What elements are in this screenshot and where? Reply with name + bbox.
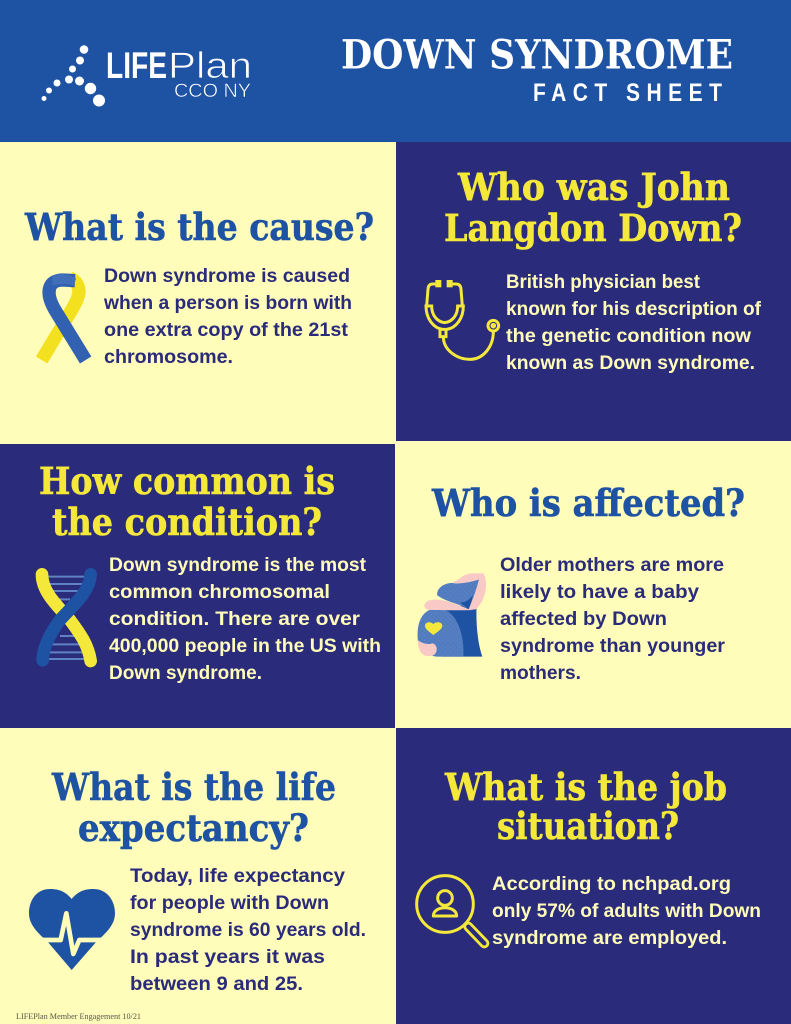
heading: job situation (444, 765, 727, 848)
body text: how common: common chromosomal (109, 581, 330, 603)
panel: what is the life expectancy (0, 728, 395, 1024)
body text: John Langdon Down: known for his description of (506, 298, 761, 320)
logo: LIFEPlan CCO NY: CCO NY (174, 80, 251, 102)
body text: who is affected: syndrome than younger (500, 635, 725, 657)
body text: who is affected: Older mothers are more (500, 554, 724, 576)
icon: awareness ribbon (42, 274, 86, 360)
panel: what is the job situation (396, 728, 791, 1024)
body text: job situation: According to nchpad.org (492, 873, 731, 895)
heading: how common: How common is (39, 459, 335, 503)
body text: John Langdon Down: British physician best (506, 271, 700, 293)
body text: life expectancy: syndrome is 60 years old. (130, 919, 366, 941)
body text: how common: Down syndrome. (109, 662, 262, 684)
heading: job situation: What is the job (444, 765, 727, 809)
icon: magnifier with person (417, 876, 484, 943)
body text: life expectancy (130, 865, 366, 995)
heading: life expectancy (51, 765, 336, 850)
body text: cause (103, 265, 352, 368)
body text: John Langdon Down: the genetic condition now (506, 325, 752, 347)
body text: life expectancy: between 9 and 25. (130, 973, 303, 995)
body text: job situation: syndrome are employed. (492, 927, 727, 949)
body text: cause: Down syndrome is caused (104, 265, 350, 287)
heading: John Langdon Down (444, 165, 742, 250)
title: DOWN SYNDROME (341, 32, 733, 78)
logo: LIFEPlan CCO NY (42, 45, 252, 106)
icon: heart with pulse (29, 889, 115, 970)
heading: cause: What is the cause? (24, 205, 374, 249)
body text: how common: 400,000 people in the US with (109, 635, 381, 657)
body text: how common: condition. There are over (109, 608, 360, 630)
body text: life expectancy: for people with Down (130, 892, 329, 914)
heading: life expectancy: expectancy? (78, 806, 309, 850)
panel: who is affected (396, 441, 791, 728)
heading: John Langdon Down: Who was John (457, 165, 730, 209)
body text: John Langdon Down: known as Down syndrome. (506, 352, 755, 374)
panel: what is the cause (0, 142, 395, 443)
body text: who is affected: mothers. (500, 662, 581, 684)
header banner (0, 0, 791, 142)
panel: who was John Langdon Down (396, 142, 791, 441)
heading: how common (39, 459, 335, 544)
heading: job situation: situation? (497, 804, 679, 848)
heading: how common: the condition? (52, 500, 322, 544)
body text: who is affected: likely to have a baby (500, 581, 699, 603)
body text: cause: when a person is born with (103, 292, 352, 314)
heading: life expectancy: What is the life (51, 765, 336, 809)
icon: stethoscope (426, 280, 499, 359)
heading: John Langdon Down: Langdon Down? (444, 206, 742, 250)
body text: job situation: only 57% of adults with Down (492, 900, 761, 922)
body text: John Langdon Down (506, 271, 761, 374)
logo: LIFEPlan CCO NY: Plan (168, 45, 252, 86)
body text: how common (109, 554, 381, 684)
footer credit: LIFEPlan Member Engagement 10/21 (16, 1012, 141, 1021)
subtitle: FACT SHEET (533, 78, 722, 106)
body text: who is affected: affected by Down (500, 608, 667, 630)
logo: LIFEPlan CCO NY: LIFE (106, 45, 167, 86)
body text: who is affected (500, 554, 725, 684)
body text: how common: Down syndrome is the most (109, 554, 366, 576)
body text: job situation (492, 873, 761, 949)
body text: life expectancy: In past years it was (130, 946, 325, 968)
heading: who is affected: Who is affected? (431, 481, 745, 525)
body text: life expectancy: Today, life expectancy (130, 865, 345, 887)
panel: how common is the condition (0, 444, 395, 728)
body text: cause: one extra copy of the 21st (104, 319, 349, 341)
icon: pregnant woman (418, 573, 486, 657)
icon: DNA helix (42, 574, 91, 661)
body text: cause: chromosome. (104, 346, 233, 368)
